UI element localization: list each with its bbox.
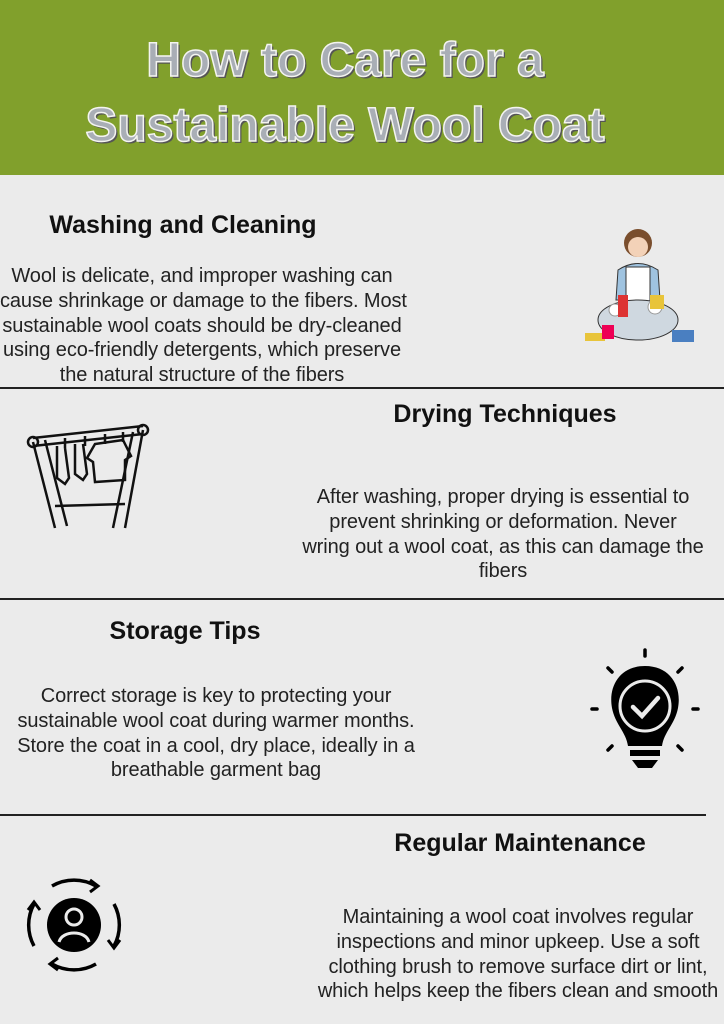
text: drying [302,486,704,582]
text: drying: fibers [479,560,527,582]
text: washing: Wool is delicate, and improper washing can [11,265,393,287]
text: storage: Store the coat in a cool, dry place, ideally in a [17,735,415,757]
text: storage: sustainable wool coat during warmer months. [17,710,414,732]
text: washing: cause shrinkage or damage to the fibers. Most [0,290,407,312]
text: maintenance [318,906,718,1002]
text: drying: After washing, proper drying is essential to [317,486,689,508]
heading: washing: Washing and Cleaning [49,211,317,239]
text: storage: breathable garment bag [111,759,321,781]
icon: person in cycle arrows [26,878,122,972]
text: maintenance: which helps keep the fibers clean and smooth [318,980,718,1002]
title [85,34,606,152]
heading: maintenance: Regular Maintenance [394,829,646,857]
icon: drying rack [26,424,150,528]
text: washing: sustainable wool coats should be dry-cleaned [2,315,402,337]
icon: woman washing clothes [585,229,694,342]
text: washing [0,265,407,386]
text: maintenance: Maintaining a wool coat involves regular [343,906,693,928]
icon: lightbulb with check [590,648,700,768]
heading: storage: Storage Tips [110,617,260,645]
title: How to Care for a [146,34,544,87]
text: maintenance: clothing brush to remove surface dirt or lint, [329,956,707,978]
text: maintenance: inspections and minor upkeep. Use a soft [337,931,699,953]
header banner [0,0,724,175]
heading: drying: Drying Techniques [393,400,617,428]
title: Sustainable Wool Coat [85,99,605,152]
text: washing: the natural structure of the fibers [60,364,344,386]
text: storage: Correct storage is key to protecting your [41,685,391,707]
text: washing: using eco-friendly detergents, which preserve [3,339,401,361]
text: storage [17,685,415,781]
text: drying: prevent shrinking or deformation. Never [329,511,677,533]
text: drying: wring out a wool coat, as this can damage the [302,536,704,558]
